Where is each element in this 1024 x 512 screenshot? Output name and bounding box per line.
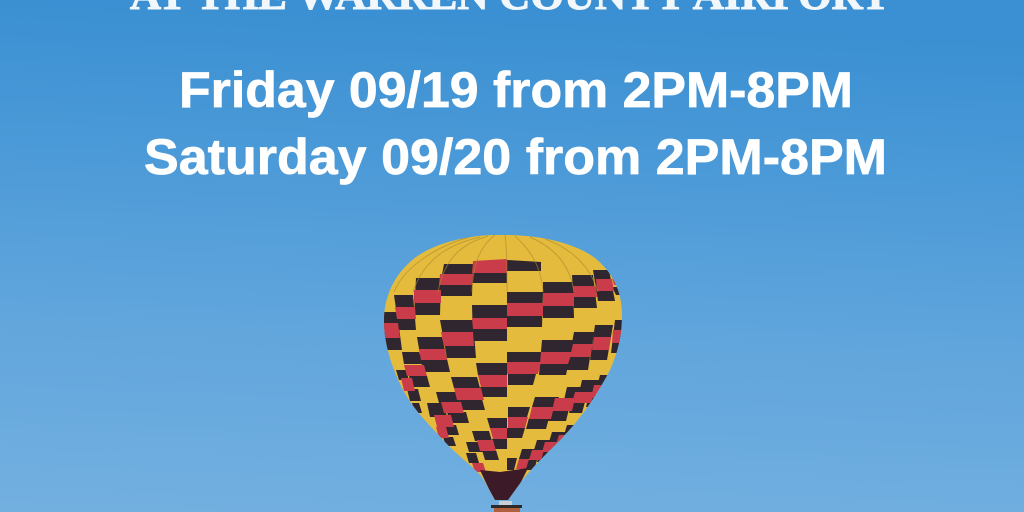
red checker bands (370, 259, 630, 472)
dark checker bands (370, 260, 630, 470)
schedule text: Friday 09/19 from 2PM-8PM (179, 62, 853, 118)
basket and burner (491, 501, 522, 512)
hot air balloon (384, 235, 622, 512)
schedule text: Saturday 09/20 from 2PM-8PM (144, 129, 887, 185)
neck of the envelope (480, 468, 528, 502)
gore seams (394, 235, 598, 292)
schedule text (144, 62, 887, 185)
balloon envelope (384, 235, 622, 500)
